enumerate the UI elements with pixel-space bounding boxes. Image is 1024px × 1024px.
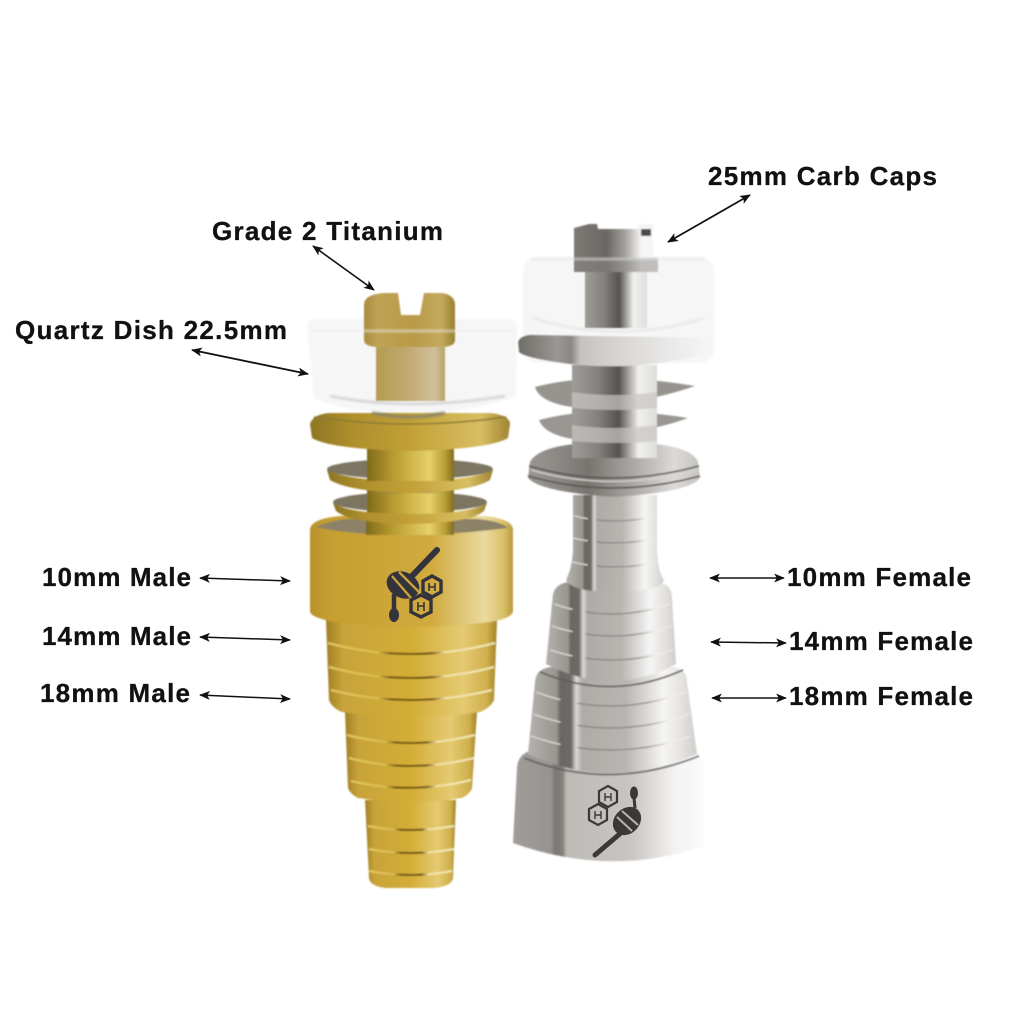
label: 10mm Male: 10mm Male bbox=[42, 562, 191, 592]
arrow: Grade 2 Titanium bbox=[313, 246, 374, 290]
arrow: 14mm Male bbox=[200, 637, 290, 640]
gold quartz dish body bbox=[307, 319, 517, 414]
gold stem bbox=[376, 347, 445, 401]
label: 18mm Male: 18mm Male bbox=[40, 678, 190, 708]
gold fin three bbox=[333, 492, 487, 524]
arrow: 10mm Female bbox=[710, 577, 784, 579]
silver logo hexagons bbox=[589, 786, 617, 825]
label: 14mm Female: 14mm Female bbox=[789, 626, 973, 656]
gold screw head bbox=[364, 293, 455, 347]
silver stem bbox=[585, 272, 647, 328]
arrow: 14mm Female bbox=[711, 642, 786, 643]
label: Grade 2 Titanium: Grade 2 Titanium bbox=[212, 216, 443, 246]
gold collar bbox=[310, 516, 513, 627]
silver top disc bbox=[518, 335, 714, 366]
label: 10mm Female: 10mm Female bbox=[787, 562, 971, 592]
gold second section bbox=[326, 620, 497, 717]
silver logo bbox=[589, 786, 646, 855]
gold top disc bbox=[310, 413, 510, 451]
silver fin one bbox=[535, 378, 695, 408]
gold logo hexagons bbox=[411, 576, 441, 617]
arrow: 25mm Carb Caps bbox=[668, 195, 750, 242]
silver logo honey dipper bbox=[595, 787, 646, 855]
arrow: 18mm Male bbox=[200, 695, 290, 699]
label: 14mm Male: 14mm Male bbox=[42, 621, 191, 651]
silver fin two bbox=[539, 411, 688, 440]
arrow: 18mm Female bbox=[712, 697, 786, 699]
silver screw head bbox=[574, 224, 658, 272]
gold titanium nail bbox=[310, 293, 513, 888]
silver section three bbox=[524, 667, 699, 775]
silver cone section bbox=[566, 495, 664, 592]
gold third section bbox=[345, 712, 477, 802]
silver titanium nail bbox=[513, 224, 714, 861]
gold neck bbox=[367, 448, 454, 520]
silver section two bbox=[540, 582, 683, 687]
silver threaded ring bbox=[528, 442, 700, 497]
label: 25mm Carb Caps: 25mm Carb Caps bbox=[708, 161, 937, 191]
label: 18mm Female: 18mm Female bbox=[789, 681, 973, 711]
gold quartz dish rims bbox=[310, 331, 515, 417]
silver base section bbox=[513, 750, 704, 861]
silver neck bbox=[572, 365, 657, 458]
gold bottom section bbox=[365, 800, 456, 888]
gold fin two bbox=[327, 451, 493, 493]
silver quartz dish rims bbox=[530, 259, 706, 332]
gold logo bbox=[382, 550, 441, 622]
silver quartz dish body bbox=[523, 257, 714, 363]
arrow: Quartz Dish bbox=[192, 350, 308, 374]
label: Quartz Dish: Quartz Dish 22.5mm bbox=[15, 315, 287, 345]
arrow: 10mm Male bbox=[200, 578, 290, 581]
gold logo honey dipper bbox=[382, 550, 437, 622]
